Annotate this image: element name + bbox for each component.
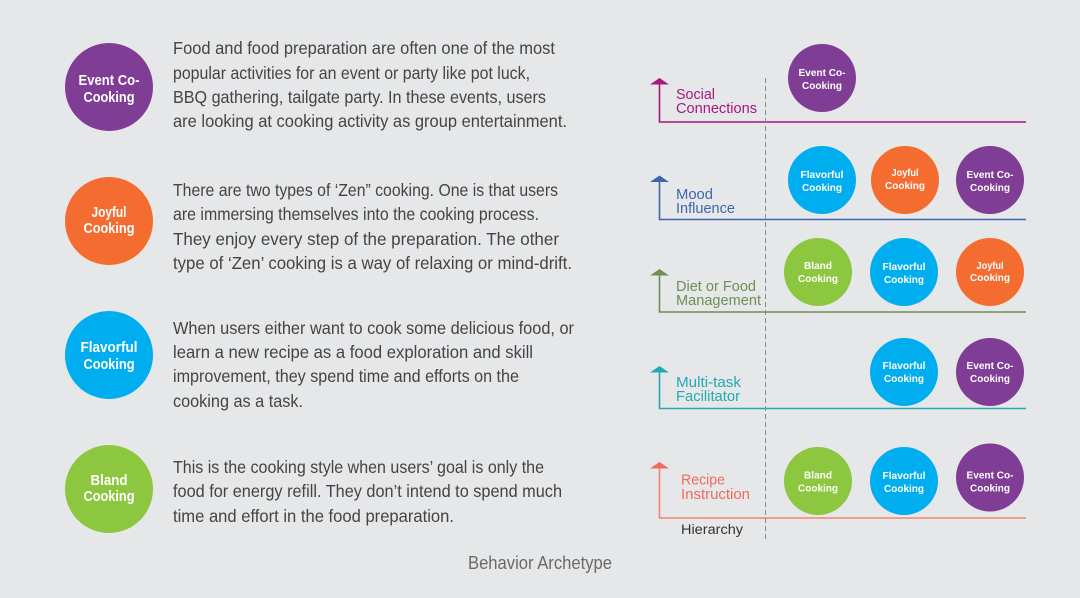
badge: bland cooking: [65, 445, 153, 533]
bubble: bland cooking: [784, 447, 852, 515]
text: event co-cooking description: Food and food preparation are often one of the most: [173, 38, 555, 58]
text: flavorful cooking description: improvement, they spend time and efforts on the: [173, 366, 519, 386]
row: diet or food management: [650, 238, 1026, 312]
label: hierarchy: Hierarchy: [681, 522, 743, 537]
label: recipe instruction: Instruction: [681, 487, 750, 503]
badge: flavorful cooking: [65, 311, 153, 399]
text: bland cooking description: [173, 457, 562, 526]
label: multi-task facilitator: Facilitator: [676, 389, 740, 405]
badge: bland cooking: Bland: [90, 472, 128, 489]
bubble: bland cooking: Bland: [804, 470, 832, 482]
row: multi-task facilitator: [650, 338, 1026, 408]
bubble: event co-cooking: Event Co-: [798, 67, 846, 79]
axis arrow: diet or food management: [650, 269, 1026, 312]
bubble: event co-cooking: Cooking: [970, 373, 1010, 385]
panel: flavorful cooking description: [65, 311, 574, 411]
bubble: flavorful cooking: Flavorful: [882, 470, 926, 482]
panel: bland cooking description: [65, 445, 562, 533]
label: social connections: Social: [676, 87, 715, 103]
label: mood influence: Mood: [676, 187, 713, 203]
badge: event co-cooking: Event Co-: [78, 72, 140, 89]
badge: bland cooking: Cooking: [84, 488, 134, 505]
badge: flavorful cooking: Flavorful: [80, 339, 138, 356]
text: joyful cooking description: They enjoy every step of the preparation. The other: [173, 229, 559, 249]
axis arrow: multi-task facilitator: [650, 366, 1026, 408]
axis arrow: recipe instruction: [650, 462, 1026, 518]
text: bland cooking description: food for energy refill. They don’t intend to spend much: [173, 481, 562, 501]
bubble: flavorful cooking: [870, 338, 938, 406]
bubble: joyful cooking: Joyful: [892, 167, 919, 179]
text: flavorful cooking description: When users either want to cook some delicious food, or: [173, 318, 574, 338]
badge: event co-cooking: Cooking: [84, 89, 134, 106]
bubble: flavorful cooking: Cooking: [802, 182, 842, 194]
bubble: flavorful cooking: Flavorful: [882, 360, 926, 372]
label: diet or food management: Management: [676, 293, 761, 309]
bubble: event co-cooking: Event Co-: [966, 169, 1014, 181]
bubble: flavorful cooking: Cooking: [884, 373, 924, 385]
bubble: event co-cooking: Event Co-: [966, 470, 1014, 482]
bubble: joyful cooking: [871, 146, 939, 214]
badge: joyful cooking: Cooking: [84, 220, 134, 237]
bubble: event co-cooking: [956, 146, 1024, 214]
badge: joyful cooking: [65, 177, 153, 265]
bubble: bland cooking: Bland: [804, 260, 832, 272]
bubble: flavorful cooking: Cooking: [884, 483, 924, 495]
label: recipe instruction: Recipe: [681, 472, 725, 488]
bubble: flavorful cooking: [870, 447, 938, 515]
bubble: joyful cooking: Cooking: [885, 180, 925, 192]
text: joyful cooking description: are immersing themselves into the cooking process.: [173, 204, 539, 224]
badge: event co-cooking: [65, 43, 153, 131]
row: recipe instruction: [650, 444, 1026, 518]
axis arrow: social connections: [650, 78, 1026, 122]
panel: joyful cooking description: [65, 177, 572, 273]
bubble: bland cooking: [784, 238, 852, 306]
text: event co-cooking description: popular activities for an event or party like pot luck,: [173, 63, 530, 83]
bubble: flavorful cooking: [870, 238, 938, 306]
badge: joyful cooking: Joyful: [92, 204, 126, 221]
label: diet or food management: Diet or Food: [676, 279, 756, 295]
text: joyful cooking description: type of ‘Zen’ cooking is a way of relaxing or mind-drift.: [173, 253, 572, 273]
bubble: flavorful cooking: [788, 146, 856, 214]
bubble: bland cooking: Cooking: [798, 273, 838, 285]
bubble: joyful cooking: Joyful: [976, 260, 1004, 272]
bubble: joyful cooking: Cooking: [970, 272, 1010, 284]
bubble: event co-cooking: [788, 44, 856, 112]
label: multi-task facilitator: [676, 375, 742, 405]
label: multi-task facilitator: Multi-task: [676, 375, 742, 391]
row: mood influence: [650, 146, 1026, 220]
label: mood influence: Influence: [676, 201, 735, 217]
panel: event co-cooking description: [65, 38, 567, 131]
label: social connections: [676, 87, 757, 117]
bubble: flavorful cooking: Cooking: [884, 274, 924, 286]
bubble: event co-cooking: Event Co-: [966, 360, 1014, 372]
badge: flavorful cooking: Cooking: [84, 356, 134, 373]
label: diet or food management: [676, 279, 761, 309]
text: flavorful cooking description: learn a new recipe as a food exploration and skill: [173, 342, 533, 362]
chart: hierarchy by archetype: [650, 44, 1026, 539]
bubble: joyful cooking: [956, 238, 1024, 306]
text: flavorful cooking description: [173, 318, 574, 411]
text: bland cooking description: This is the cooking style when users’ goal is only the: [173, 457, 544, 477]
bubble: event co-cooking: [956, 338, 1024, 406]
bubble: event co-cooking: Cooking: [802, 80, 842, 92]
bubble: event co-cooking: Cooking: [970, 482, 1010, 494]
label: mood influence: [676, 187, 735, 217]
bubble: event co-cooking: [956, 444, 1024, 512]
label: recipe instruction: [681, 472, 750, 503]
label: social connections: Connections: [676, 101, 757, 117]
text: joyful cooking description: There are two types of ‘Zen” cooking. One is that users: [173, 180, 558, 200]
text: bland cooking description: time and effort in the food preparation.: [173, 506, 454, 526]
axis arrow: mood influence: [650, 176, 1026, 220]
bubble: event co-cooking: Cooking: [970, 182, 1010, 194]
text: joyful cooking description: [173, 180, 572, 273]
text: event co-cooking description: BBQ gathering, tailgate party. In these events, users: [173, 87, 546, 107]
row: social connections: [650, 44, 1026, 122]
bubble: flavorful cooking: Flavorful: [882, 261, 926, 273]
text: event co-cooking description: are looking at cooking activity as group entertainment.: [173, 111, 567, 131]
bubble: flavorful cooking: Flavorful: [800, 169, 844, 181]
text: flavorful cooking description: cooking as a task.: [173, 391, 303, 411]
caption: behavior archetype: Behavior Archetype: [468, 553, 612, 573]
text: event co-cooking description: [173, 38, 567, 131]
bubble: bland cooking: Cooking: [798, 482, 838, 494]
